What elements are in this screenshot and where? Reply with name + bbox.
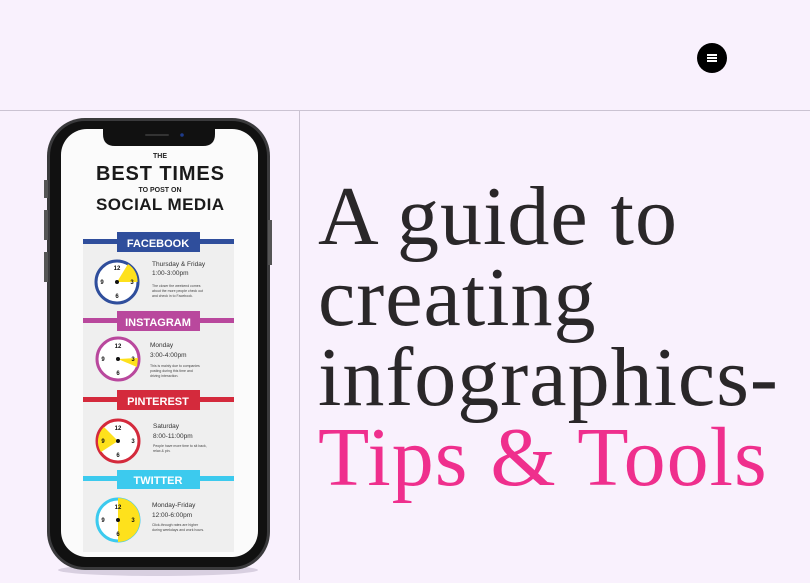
phone mockup: 12	[114, 266, 121, 272]
phone mockup: during weekdays and work hours.	[152, 528, 204, 532]
title text: Tips & Tools	[318, 411, 768, 504]
header divider	[0, 110, 810, 111]
phone mockup: 3	[130, 280, 134, 286]
phone mockup: This is mainly due to companies	[150, 364, 200, 368]
phone mockup: relax & pin.	[153, 449, 171, 453]
title text: A guide to	[318, 170, 678, 263]
phone mockup	[44, 118, 272, 576]
facebook	[83, 239, 234, 244]
phone mockup: 3	[131, 357, 135, 363]
phone mockup: BEST TIMES	[96, 163, 224, 185]
phone mockup: about the more people check out	[152, 289, 203, 293]
phone mockup: 3	[131, 439, 135, 445]
phone mockup: posting during this time and	[150, 369, 193, 373]
vertical divider	[299, 111, 300, 580]
phone mockup: 3:00-4:00pm	[150, 352, 186, 359]
phone mockup: 8:00-11:00pm	[153, 433, 193, 440]
phone mockup: 9	[101, 439, 105, 445]
phone mockup: THE	[153, 153, 167, 160]
phone mockup: Click-through rates are higher	[152, 523, 199, 527]
phone mockup: 12	[115, 344, 122, 350]
pinterest	[83, 397, 234, 402]
phone mockup: People have more time to sit back,	[153, 444, 207, 448]
phone mockup: 9	[100, 280, 104, 286]
phone mockup: 6	[116, 532, 120, 538]
phone mockup: 12	[115, 426, 122, 432]
phone mockup: 1:00-3:00pm	[152, 270, 188, 277]
phone mockup: 3	[131, 518, 135, 524]
phone mockup: The closer the weekend comes	[152, 284, 201, 288]
phone mockup: 9	[101, 518, 105, 524]
phone mockup: PINTEREST	[127, 396, 189, 408]
phone mockup: TWITTER	[134, 475, 182, 487]
phone mockup: and check in to Facebook.	[152, 294, 193, 298]
phone mockup: Thursday & Friday	[152, 261, 206, 268]
phone mockup: 6	[116, 371, 120, 377]
phone mockup: FACEBOOK	[127, 238, 189, 250]
twitter	[83, 476, 234, 481]
phone mockup: INSTAGRAM	[125, 317, 191, 329]
phone mockup: driving interaction.	[150, 374, 178, 378]
icon: menu button	[697, 43, 727, 73]
phone mockup: 9	[101, 357, 105, 363]
phone mockup: Monday-Friday	[152, 502, 196, 509]
phone mockup: 12:00-6:00pm	[152, 512, 192, 519]
phone mockup: Monday	[150, 342, 174, 349]
phone mockup: SOCIAL MEDIA	[96, 195, 224, 214]
phone mockup: Saturday	[153, 423, 180, 430]
phone mockup: TO POST ON	[138, 187, 182, 194]
phone mockup: 6	[116, 453, 120, 459]
title text: infographics-	[318, 331, 779, 424]
instagram	[83, 318, 234, 323]
title text: creating	[318, 251, 596, 344]
phone mockup: 12	[115, 505, 122, 511]
phone mockup: 6	[115, 294, 119, 300]
